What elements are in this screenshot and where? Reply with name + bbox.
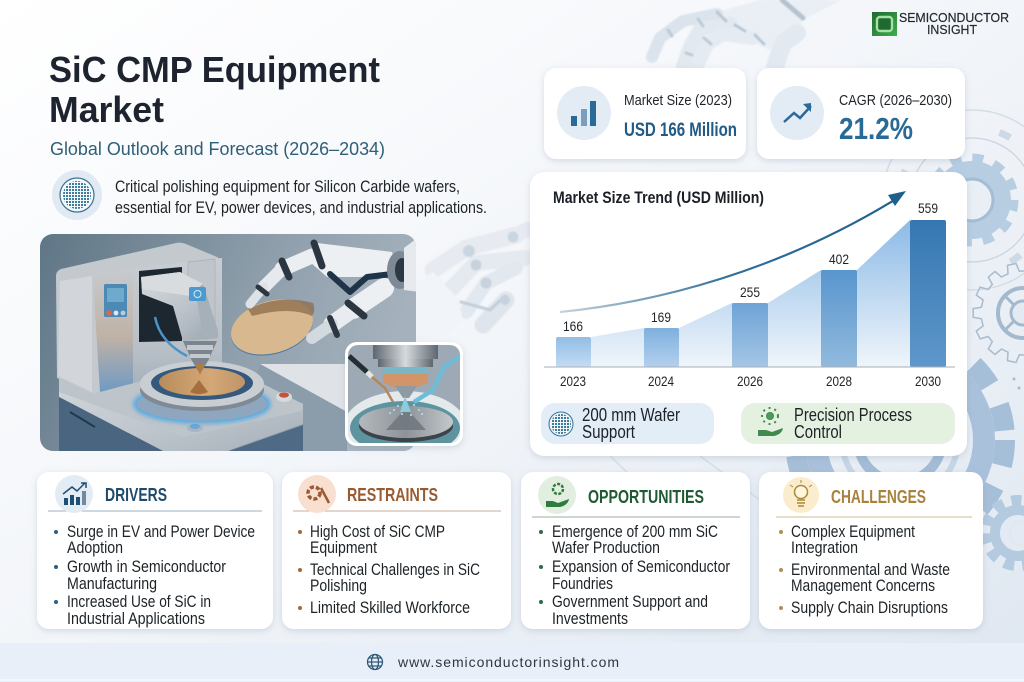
bullet list: Expansion of Semiconductor xyxy=(552,557,730,576)
title: SiC CMP Equipment xyxy=(49,49,380,90)
bullet list: Complex Equipment xyxy=(791,522,915,541)
pill: 200 mm wafer support: Support xyxy=(582,422,635,442)
bullet list: Polishing xyxy=(310,576,367,595)
KPI card: market size: Market Size (2023) xyxy=(624,92,732,109)
bullet list: Industrial Applications xyxy=(67,609,205,628)
panel: opportunities xyxy=(521,472,750,629)
small gear xyxy=(986,501,1024,565)
bullet list: Integration xyxy=(791,538,858,557)
bars xyxy=(556,220,946,367)
panel: drivers xyxy=(37,472,273,629)
bullet list: Limited Skilled Workforce xyxy=(310,598,470,617)
heading: RESTRAINTS xyxy=(347,485,438,505)
chart title: Market Size Trend (USD Million) xyxy=(553,188,764,207)
title xyxy=(49,49,380,130)
inset: polishing close-up xyxy=(343,342,466,450)
bullet list: Surge in EV and Power Device xyxy=(67,522,255,541)
bullet list: Growth in Semiconductor xyxy=(67,557,226,576)
bullet list: Emergence of 200 mm SiC xyxy=(552,522,718,541)
pill: precision process control: Control xyxy=(794,422,842,442)
KPI card: market size xyxy=(544,68,746,159)
year labels xyxy=(560,373,941,389)
polishing ring and wafer xyxy=(135,361,269,422)
axis xyxy=(544,366,955,368)
panel: challenges xyxy=(759,472,983,629)
footer: www.semiconductorinsight.com xyxy=(397,654,619,670)
growth arrow xyxy=(560,191,906,312)
icon: hand with gear xyxy=(538,476,576,514)
bullet list: Increased Use of SiC in xyxy=(67,592,211,611)
value labels xyxy=(563,200,938,334)
value labels: 559 xyxy=(918,200,938,216)
subtitle: Global Outlook and Forecast (2026–2034) xyxy=(50,139,385,159)
outline gear xyxy=(973,264,1024,362)
bullet list: Wafer Production xyxy=(552,538,660,557)
year labels: 2024 xyxy=(648,373,674,389)
description: Critical polishing equipment for Silicon Carbide wafers, xyxy=(115,178,460,196)
value labels: 169 xyxy=(651,309,671,325)
logo: SEMICONDUCTOR xyxy=(899,11,1009,25)
bullet list: Environmental and Waste xyxy=(791,560,950,579)
pill: 200 mm wafer support xyxy=(541,403,714,444)
icon: green chip xyxy=(872,12,897,36)
icon: globe xyxy=(368,654,382,670)
ghost robot hand top xyxy=(652,0,842,67)
KPI card: CAGR xyxy=(757,68,965,159)
icon: light bulb xyxy=(783,477,819,513)
description xyxy=(115,178,487,217)
bullet list xyxy=(298,522,480,617)
panel: restraints xyxy=(282,472,511,629)
bullet list: Supply Chain Disruptions xyxy=(791,598,948,617)
machine base xyxy=(59,361,303,451)
logo: INSIGHT xyxy=(927,23,977,37)
year labels: 2023 xyxy=(560,373,586,389)
panel: market size trend chart xyxy=(530,172,967,456)
KPI card: CAGR: 21.2% xyxy=(839,111,913,146)
value labels: 166 xyxy=(563,318,583,334)
ghost robot hand left xyxy=(416,228,530,342)
bullet list: Manufacturing xyxy=(67,574,157,593)
bullet list: Investments xyxy=(552,609,628,628)
robotic hand with wafer xyxy=(231,240,416,356)
polishing head xyxy=(141,272,218,375)
footer xyxy=(0,643,1024,682)
icon: rising bars xyxy=(55,475,93,513)
year labels: 2028 xyxy=(826,373,852,389)
bullet list: Foundries xyxy=(552,574,613,593)
title: Market xyxy=(49,89,164,130)
bullet list xyxy=(779,522,950,617)
value labels: 402 xyxy=(829,251,849,267)
illustration: CMP machine and robotic hand xyxy=(40,234,420,451)
bullet list: Equipment xyxy=(310,538,377,557)
icon: wafer xyxy=(52,170,102,220)
KPI card: CAGR: CAGR (2026–2030) xyxy=(839,92,952,109)
pill: precision process control: Precision Process xyxy=(794,405,912,425)
heading: OPPORTUNITIES xyxy=(588,487,704,507)
bullet list: Government Support and xyxy=(552,592,708,611)
icon: gear and wrench xyxy=(298,475,336,513)
bullet list: Technical Challenges in SiC xyxy=(310,560,480,579)
logo xyxy=(872,11,1009,37)
icon: bar chart xyxy=(557,86,611,140)
bullet list: Management Concerns xyxy=(791,576,935,595)
pill: 200 mm wafer support: 200 mm Wafer xyxy=(582,405,680,425)
heading: DRIVERS xyxy=(105,485,167,505)
value labels: 255 xyxy=(740,284,760,300)
icon: trend arrow xyxy=(770,86,824,140)
year labels: 2030 xyxy=(915,373,941,389)
area under bars xyxy=(591,220,910,367)
bullet list xyxy=(54,522,255,628)
background gears xyxy=(610,110,1024,570)
machine upper housing xyxy=(56,243,222,395)
large gear xyxy=(795,335,1005,545)
pill: precision process control xyxy=(741,403,955,444)
bullet list: High Cost of SiC CMP xyxy=(310,522,445,541)
heading: CHALLENGES xyxy=(831,487,926,507)
year labels: 2026 xyxy=(737,373,763,389)
description: essential for EV, power devices, and industrial applications. xyxy=(115,199,487,217)
KPI card: market size: USD 166 Million xyxy=(624,120,737,141)
bullet list xyxy=(539,522,730,628)
bullet list: Adoption xyxy=(67,538,123,557)
